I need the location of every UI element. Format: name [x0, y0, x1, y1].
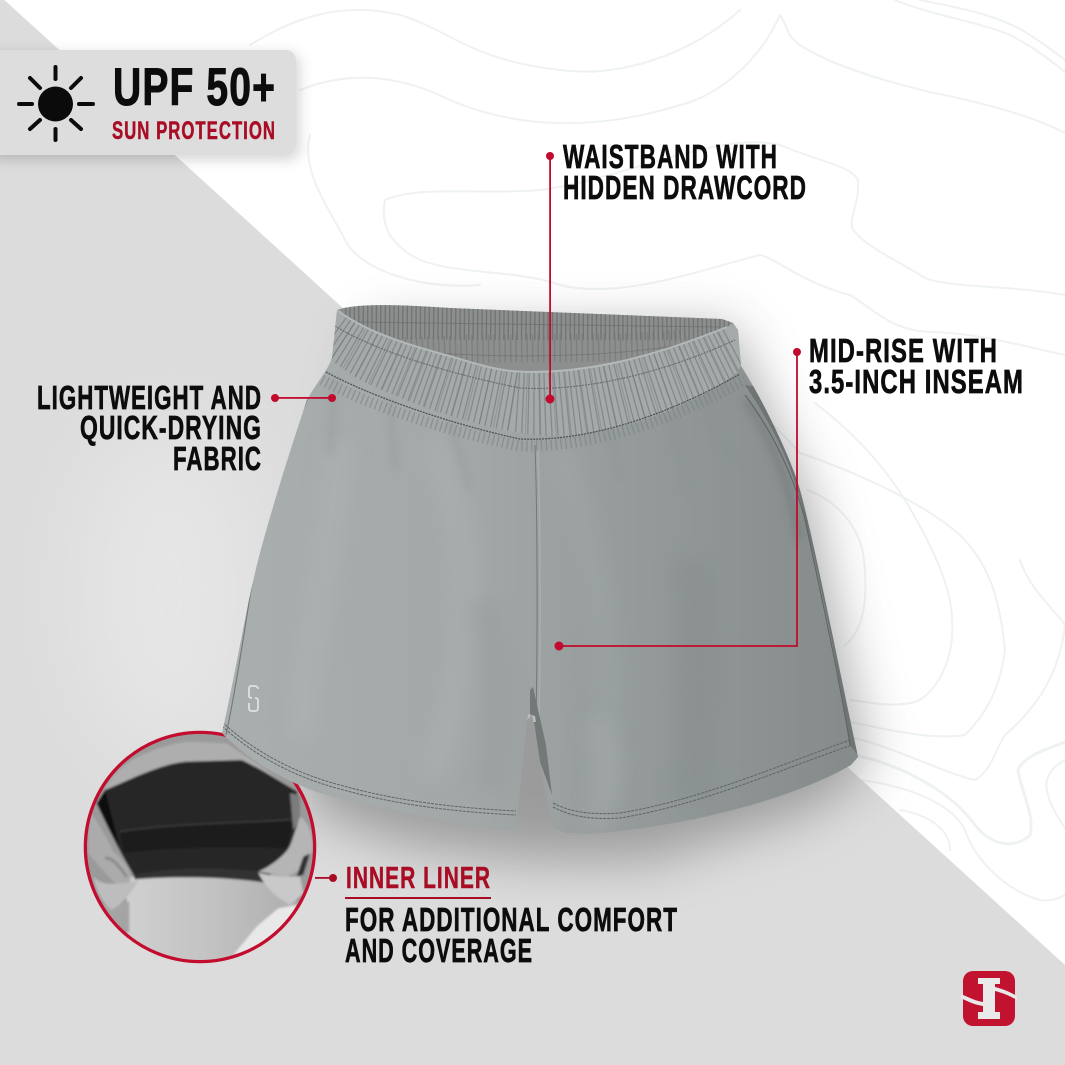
callout text: inner liner: FOR ADDITIONAL COMFORT [345, 901, 678, 938]
callout text: waistband: HIDDEN DRAWCORD [563, 169, 807, 206]
callout text: fabric: LIGHTWEIGHT AND [37, 379, 262, 416]
leader line: inner liner [315, 874, 337, 882]
topographic contour lines [250, 0, 1065, 901]
badge heading: UPF 50+ [113, 58, 276, 117]
callout text: mid-rise [809, 332, 1024, 400]
shorts shading and folds [222, 305, 870, 830]
leader line: waistband [546, 152, 554, 404]
front waistband [330, 310, 741, 436]
callout text: inner liner [345, 901, 678, 969]
callout text: inner liner: AND COVERAGE [345, 932, 533, 969]
callout text: waistband: WAISTBAND WITH [563, 138, 778, 175]
inset photo: inner liner detail [84, 730, 316, 964]
badge subheading: SUN PROTECTION [112, 117, 276, 145]
soft light glow left of shorts [80, 420, 260, 760]
callout heading: inner liner: INNER LINER [346, 860, 491, 895]
heading underline [345, 897, 491, 899]
icon: sun [19, 67, 93, 140]
brand logo [961, 971, 1017, 1026]
shorts small logo [249, 686, 258, 711]
callout text: fabric [37, 379, 262, 477]
shorts body [222, 305, 858, 834]
leader line: mid-rise [554, 348, 801, 650]
badge: UPF 50+ sun protection [0, 50, 296, 155]
callout: mid-rise inseam [554, 332, 1024, 650]
shadow behind shorts [300, 329, 868, 860]
leader line: fabric [271, 394, 336, 402]
callout: fabric [37, 379, 336, 477]
back waistband interior [337, 305, 733, 372]
side pocket seams [226, 398, 308, 735]
callout text: mid-rise: MID-RISE WITH [809, 332, 998, 369]
shorts [222, 305, 870, 834]
inset ring [86, 732, 314, 962]
callout: waistband [546, 138, 807, 404]
callout text: fabric: FABRIC [173, 440, 262, 477]
inset photo content [87, 734, 313, 960]
badge panel [0, 50, 296, 155]
callout text: waistband [563, 138, 807, 206]
hem stitching [222, 722, 516, 811]
crotch gusset [530, 687, 552, 795]
center seam [535, 445, 537, 720]
callout: inner liner [315, 860, 678, 969]
callout text: fabric: QUICK-DRYING [80, 409, 262, 446]
